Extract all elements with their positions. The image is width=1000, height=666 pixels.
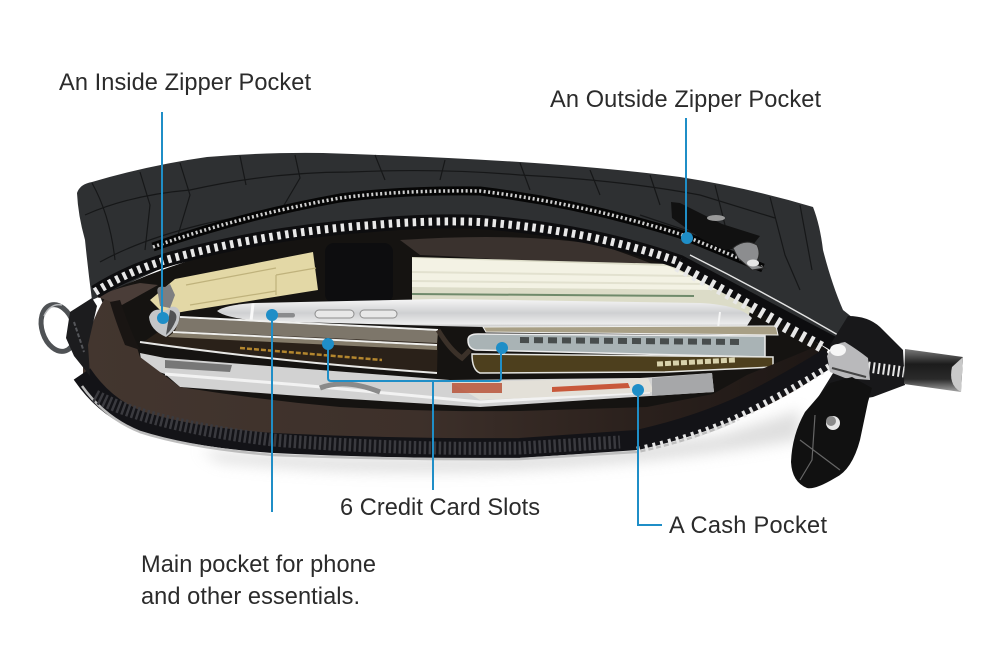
callout: outside zipper pocket [550, 87, 821, 244]
yellow card [150, 252, 318, 315]
callout: credit card slots [322, 338, 540, 521]
interior of main compartment [100, 224, 828, 433]
callout: main pocket: and other essentials. [141, 584, 360, 610]
metal zipper end bar [904, 349, 963, 392]
label: An Outside Zipper Pocket [550, 87, 821, 113]
heart zipper charm [149, 284, 180, 337]
soft shadow under wallet [200, 410, 800, 472]
left credit card slots [140, 317, 438, 373]
front brown lining [83, 298, 830, 453]
black square accessory [325, 243, 393, 303]
leader line [685, 118, 687, 238]
label: A Cash Pocket [669, 513, 827, 539]
zipper tail [812, 316, 905, 407]
end teeth [868, 367, 904, 372]
phone [217, 299, 752, 330]
lower zipper [82, 357, 832, 459]
marker dot [266, 309, 278, 321]
zipper slider [827, 342, 870, 380]
leader line [638, 390, 662, 525]
callout: inside zipper pocket [59, 70, 311, 324]
callout: cash pocket [632, 384, 827, 539]
wallet illustration [35, 153, 963, 488]
right credit card slots [438, 326, 778, 373]
label: An Inside Zipper Pocket [59, 70, 311, 96]
leader line [161, 112, 163, 318]
book [412, 257, 752, 318]
wrist loop ring [35, 298, 97, 376]
back leather panel [77, 153, 858, 350]
marker dot [157, 312, 169, 324]
upper lining [400, 237, 730, 300]
marker dot [681, 232, 693, 244]
leader line [271, 315, 273, 512]
small outside zipper [153, 191, 763, 268]
label: 6 Credit Card Slots [340, 495, 540, 521]
marker dots [322, 338, 334, 350]
leather zipper pull tab [791, 377, 872, 488]
leader lines [328, 343, 501, 490]
cash [140, 353, 714, 407]
marker dot [632, 384, 644, 396]
outside zipper pull [671, 202, 765, 270]
callout: main pocket [141, 309, 376, 610]
label: Main pocket for phone [141, 552, 376, 578]
main top zipper [95, 221, 850, 352]
